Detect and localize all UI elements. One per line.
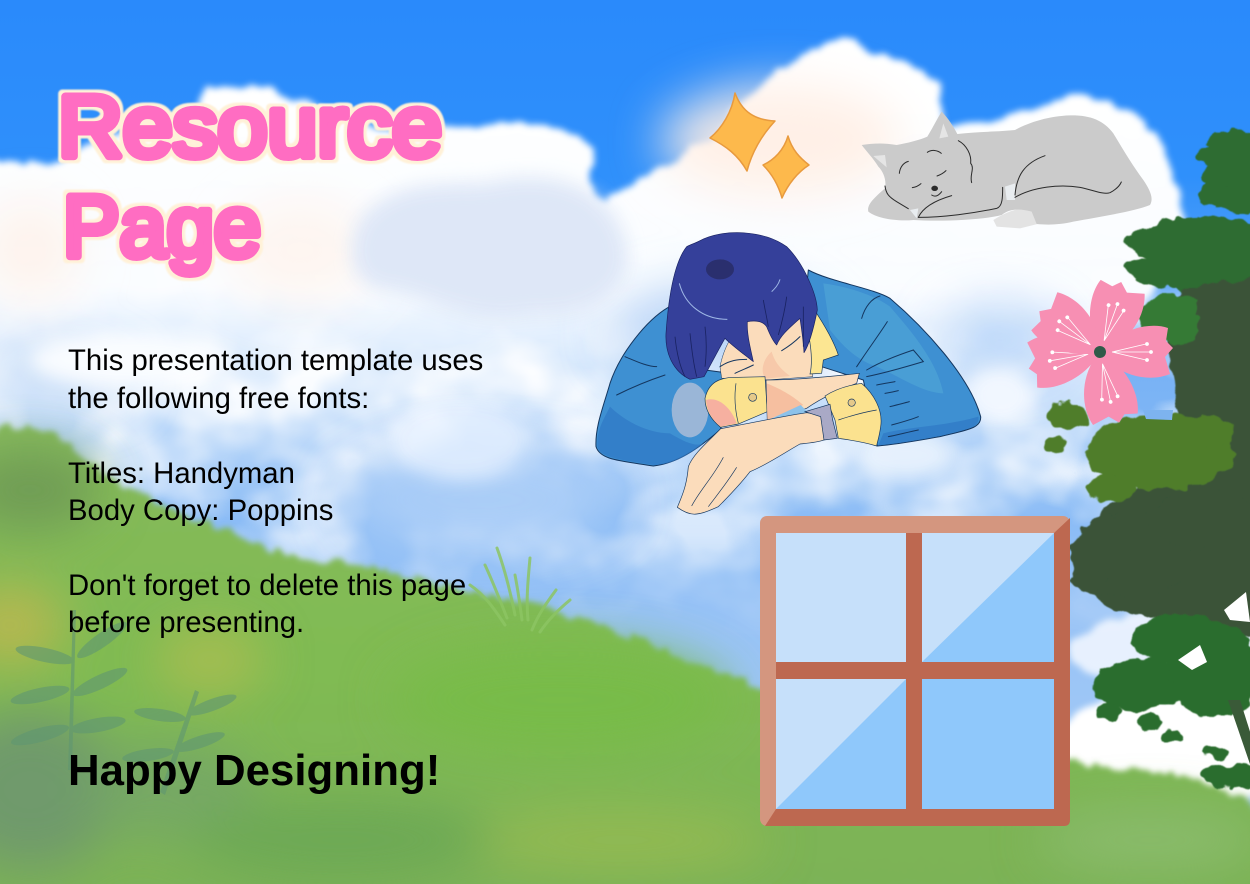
body text: font information: This presentation template uses xyxy=(68,344,483,377)
jacket xyxy=(596,270,981,466)
body text: font information: Don't forget to delete this page xyxy=(68,569,466,602)
watch xyxy=(805,404,837,440)
plants: grass blades xyxy=(470,548,570,632)
title: Resource Page xyxy=(58,79,442,275)
icon: pink flower xyxy=(1024,274,1173,429)
body text: font information: the following free fonts: xyxy=(68,382,369,415)
illustration: sleeping cat xyxy=(862,112,1152,228)
window frame xyxy=(760,516,1070,826)
icon: window xyxy=(760,516,1070,826)
tree sky gaps xyxy=(1143,410,1250,670)
title: Resource Page: Resource xyxy=(58,79,442,175)
hair strands xyxy=(675,297,803,377)
cuff buttons xyxy=(749,393,757,401)
translucent sleeve patch xyxy=(672,383,708,437)
icon: sparkles xyxy=(710,93,809,198)
body text: font information: Body Copy: Poppins xyxy=(68,494,333,527)
title: Resource Page: Page xyxy=(63,179,261,275)
lower arm and hand xyxy=(677,413,824,514)
hair xyxy=(666,233,817,379)
body text: font information xyxy=(68,344,483,639)
body text: font information: Titles: Handyman xyxy=(68,457,295,490)
face xyxy=(720,310,813,380)
closing message: Happy Designing! xyxy=(68,746,440,795)
jacket shading xyxy=(597,407,978,465)
collar xyxy=(806,309,838,374)
forearm xyxy=(766,373,859,422)
window crossbars xyxy=(906,533,922,809)
left cuff xyxy=(705,377,767,427)
plants: fern leaves xyxy=(9,610,238,795)
tree foliage xyxy=(1046,130,1250,789)
tree trunk branch xyxy=(1228,700,1250,770)
jacket and face lines xyxy=(617,296,923,437)
right sleeve cuff xyxy=(825,383,881,446)
illustration: sleeping boy xyxy=(596,233,981,514)
body text: font information: before presenting. xyxy=(68,606,304,639)
shirt strip xyxy=(768,405,808,420)
window panes xyxy=(776,533,906,662)
background: green hill xyxy=(0,426,1250,884)
